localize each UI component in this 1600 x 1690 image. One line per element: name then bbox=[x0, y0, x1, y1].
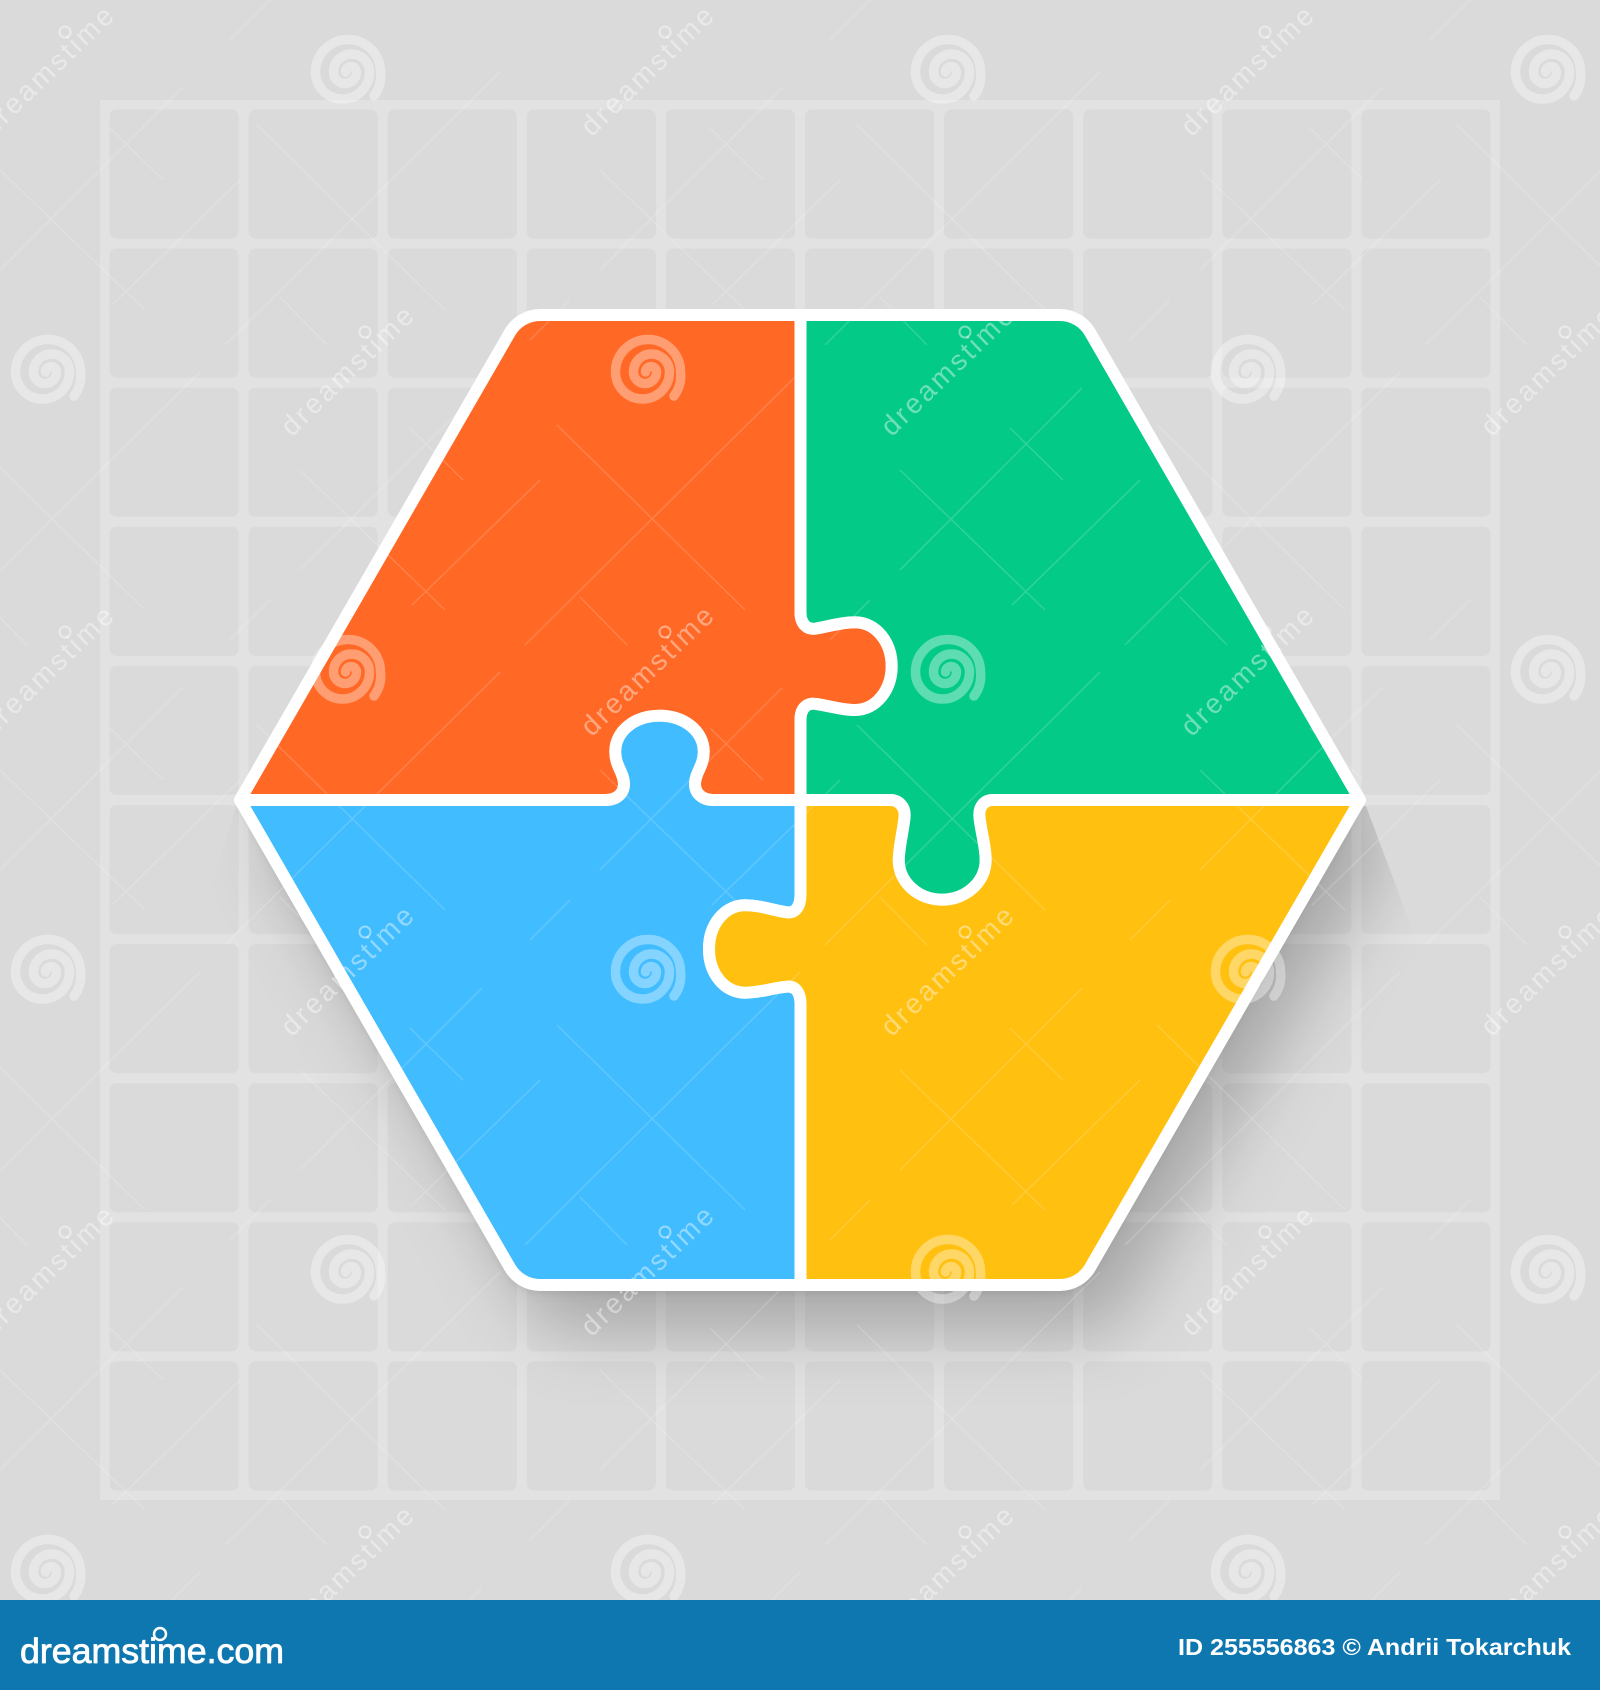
watermark overlay: dreamstime bbox=[574, 600, 720, 742]
hexagon drop shadow bbox=[238, 806, 1399, 1365]
watermark overlay: dreamstime bbox=[274, 1500, 420, 1642]
footer bar bbox=[0, 1600, 1600, 1690]
watermark overlay: dreamstime bbox=[274, 900, 420, 1042]
watermark overlay: dreamstime bbox=[1174, 1200, 1320, 1342]
footer logo spiral bbox=[154, 1628, 166, 1640]
footer credit: ID 255556863 © Andrii Tokarchuk bbox=[1178, 1634, 1571, 1660]
puzzle piece: blue bottom left bbox=[240, 716, 800, 1285]
watermark overlay: dreamstime bbox=[274, 300, 420, 442]
puzzle piece: yellow bottom right bbox=[709, 800, 1360, 1285]
watermark overlay: dreamstime bbox=[874, 900, 1020, 1042]
watermark overlay: dreamstime bbox=[874, 300, 1020, 442]
background grid bbox=[100, 100, 1500, 1500]
watermark overlay: dreamstime bbox=[1174, 0, 1320, 142]
hexagon puzzle bbox=[240, 315, 1360, 1285]
footer logo text: dreamstime.com bbox=[20, 1632, 284, 1671]
watermark overlay: dreamstime bbox=[1174, 600, 1320, 742]
watermark overlay: dreamstime bbox=[574, 0, 720, 142]
puzzle piece: green top right bbox=[800, 315, 1360, 900]
watermark overlay: dreamstime bbox=[574, 1200, 720, 1342]
watermark overlay: dreamstime bbox=[874, 1500, 1020, 1642]
puzzle piece: orange top left bbox=[240, 315, 892, 800]
